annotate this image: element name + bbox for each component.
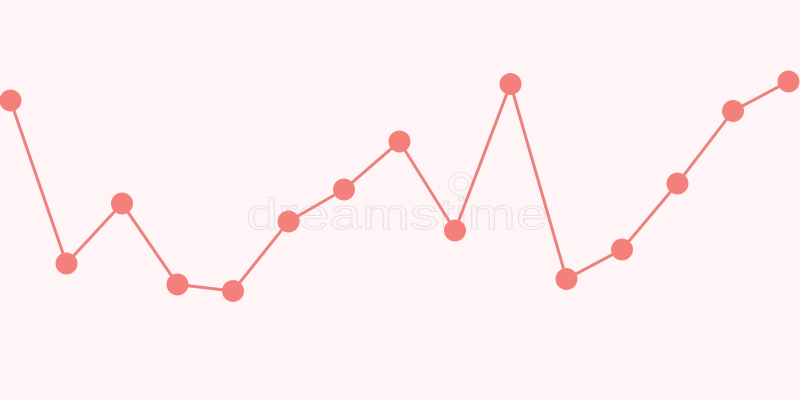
data points <box>0 70 800 302</box>
watermark: dreamstime <box>246 190 548 239</box>
watermark <box>246 172 548 239</box>
data line <box>10 82 788 291</box>
